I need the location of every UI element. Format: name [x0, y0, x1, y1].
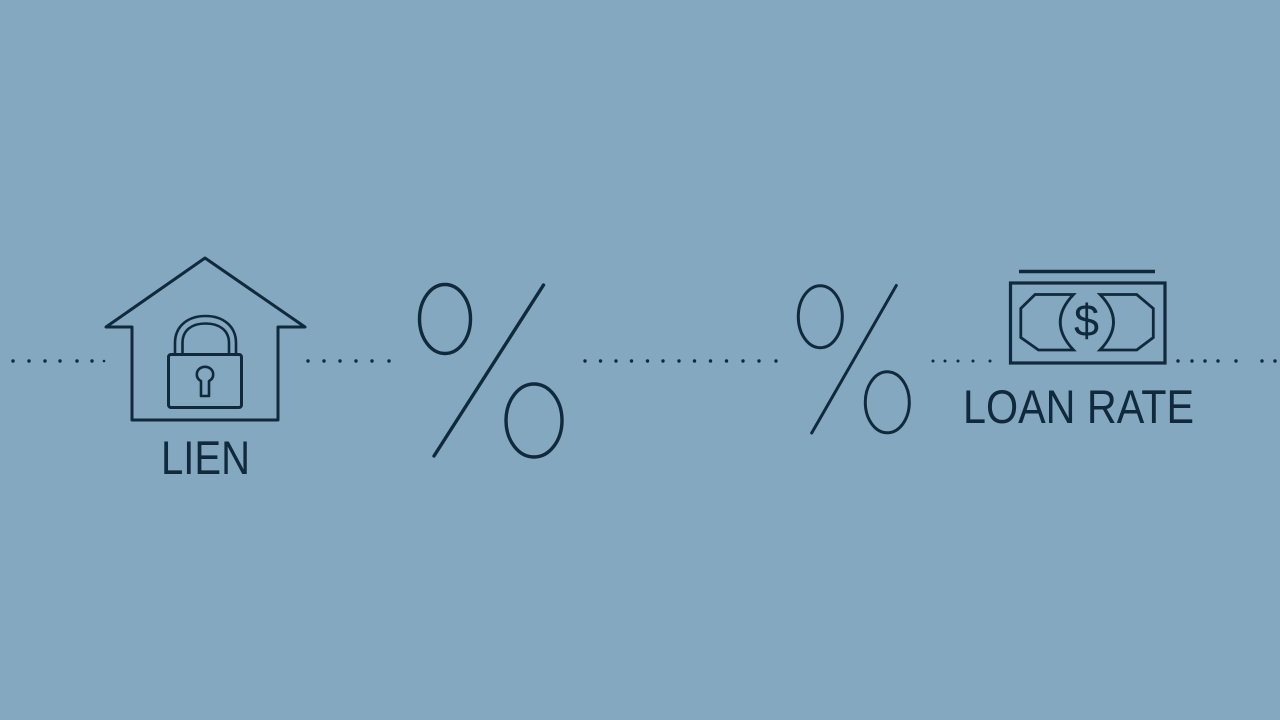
house outline: [106, 258, 305, 420]
bar above bill: [1019, 270, 1155, 273]
padlock body: [168, 354, 242, 408]
icon: dollar bill: [1010, 272, 1165, 363]
bill frame: [1010, 283, 1165, 363]
icon: house with padlock: [106, 258, 305, 420]
padlock shackle: [175, 316, 236, 354]
dollar sign: $: [1074, 295, 1099, 346]
label: lien: LIEN: [161, 431, 250, 484]
padlock keyhole: [197, 367, 213, 396]
label: loan rate: LOAN RATE: [963, 380, 1194, 433]
icon: small percent sign: [798, 286, 909, 433]
icon: large percent sign: [420, 284, 562, 457]
dotted line: connecting the icons across the page: [11, 359, 1277, 363]
bill right panel: [1100, 294, 1153, 350]
bill left panel: [1021, 294, 1074, 350]
